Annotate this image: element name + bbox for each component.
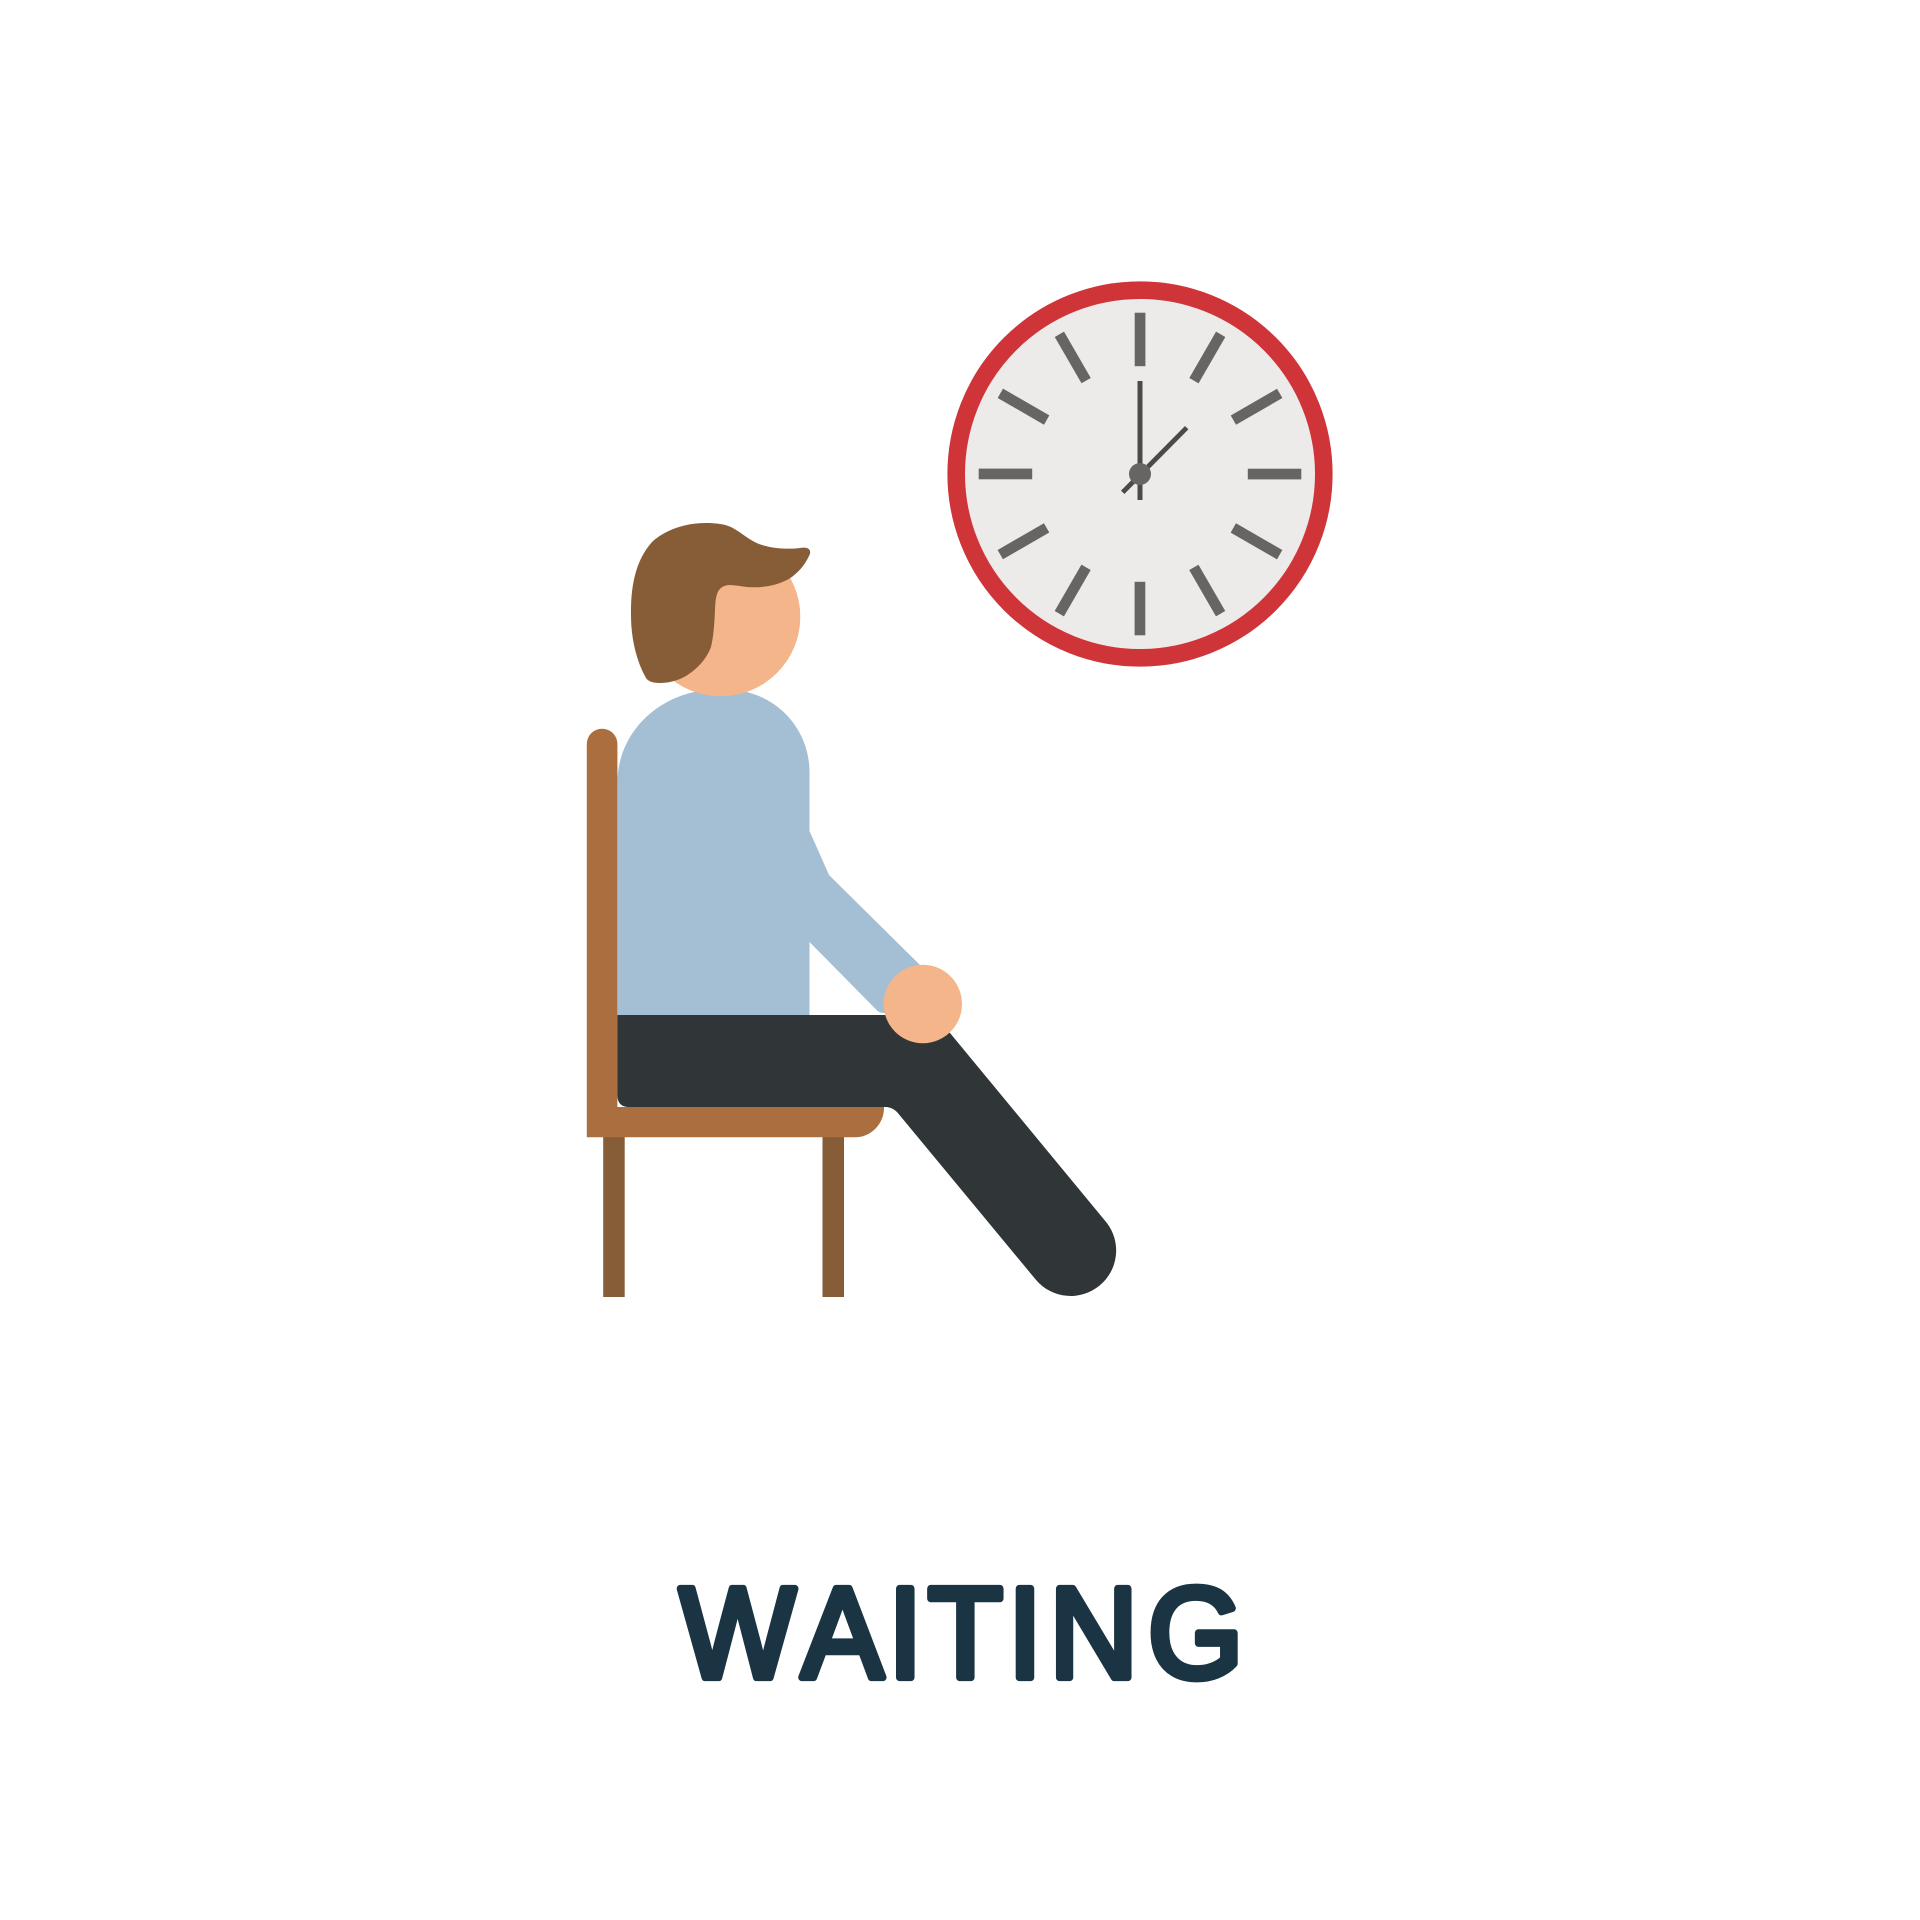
clock hands — [1121, 381, 1188, 500]
icon: chair — [587, 729, 884, 1297]
title: WAITING — [680, 1561, 1243, 1705]
chair legs — [603, 1137, 844, 1297]
figure: seated man — [617, 523, 1116, 1296]
head — [641, 537, 800, 696]
shirt and arm — [617, 692, 925, 1015]
hand — [884, 965, 962, 1043]
chair back and seat — [587, 729, 884, 1137]
clock hub — [1129, 463, 1151, 485]
icon: wall clock — [956, 290, 1324, 658]
trousers and leg — [617, 1015, 1116, 1296]
clock hour ticks — [979, 313, 1301, 635]
clock face and red rim — [956, 290, 1324, 658]
hair — [631, 523, 810, 683]
